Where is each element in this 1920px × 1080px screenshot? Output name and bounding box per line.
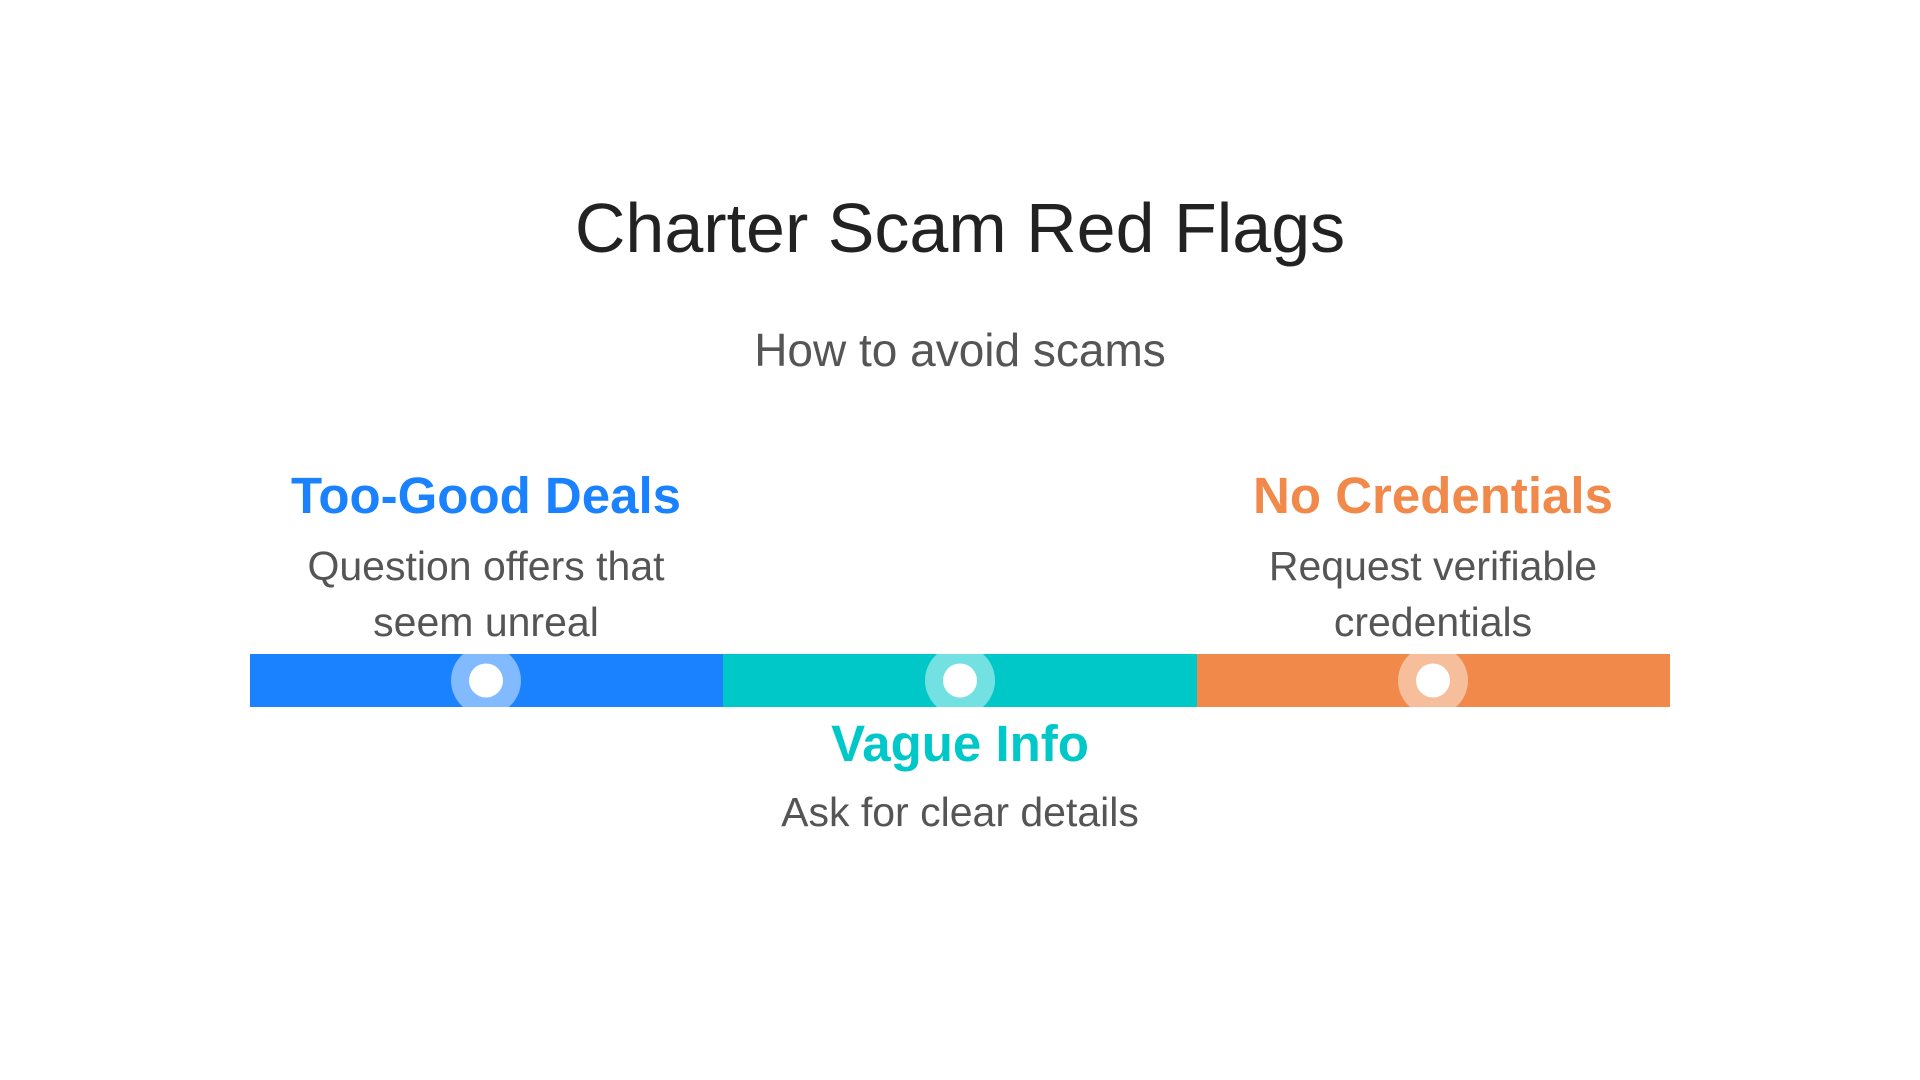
item: too-good deals: Too-Good Deals xyxy=(291,467,681,524)
item: no credentials: No Credentials xyxy=(1253,467,1613,524)
title: Charter Scam Red Flags xyxy=(575,189,1345,267)
item: too-good deals: seem unreal xyxy=(373,599,599,645)
item: no credentials xyxy=(1253,467,1613,645)
subtitle: How to avoid scams xyxy=(754,324,1166,376)
timeline bar xyxy=(250,654,1670,707)
item: vague info: Vague Info xyxy=(831,715,1089,772)
item: no credentials: credentials xyxy=(1334,599,1532,645)
item: vague info xyxy=(781,715,1139,835)
item: too-good deals: Question offers that xyxy=(307,543,665,589)
item: too-good deals xyxy=(291,467,681,645)
item: vague info: Ask for clear details xyxy=(781,789,1139,835)
item: no credentials: Request verifiable xyxy=(1269,543,1597,589)
